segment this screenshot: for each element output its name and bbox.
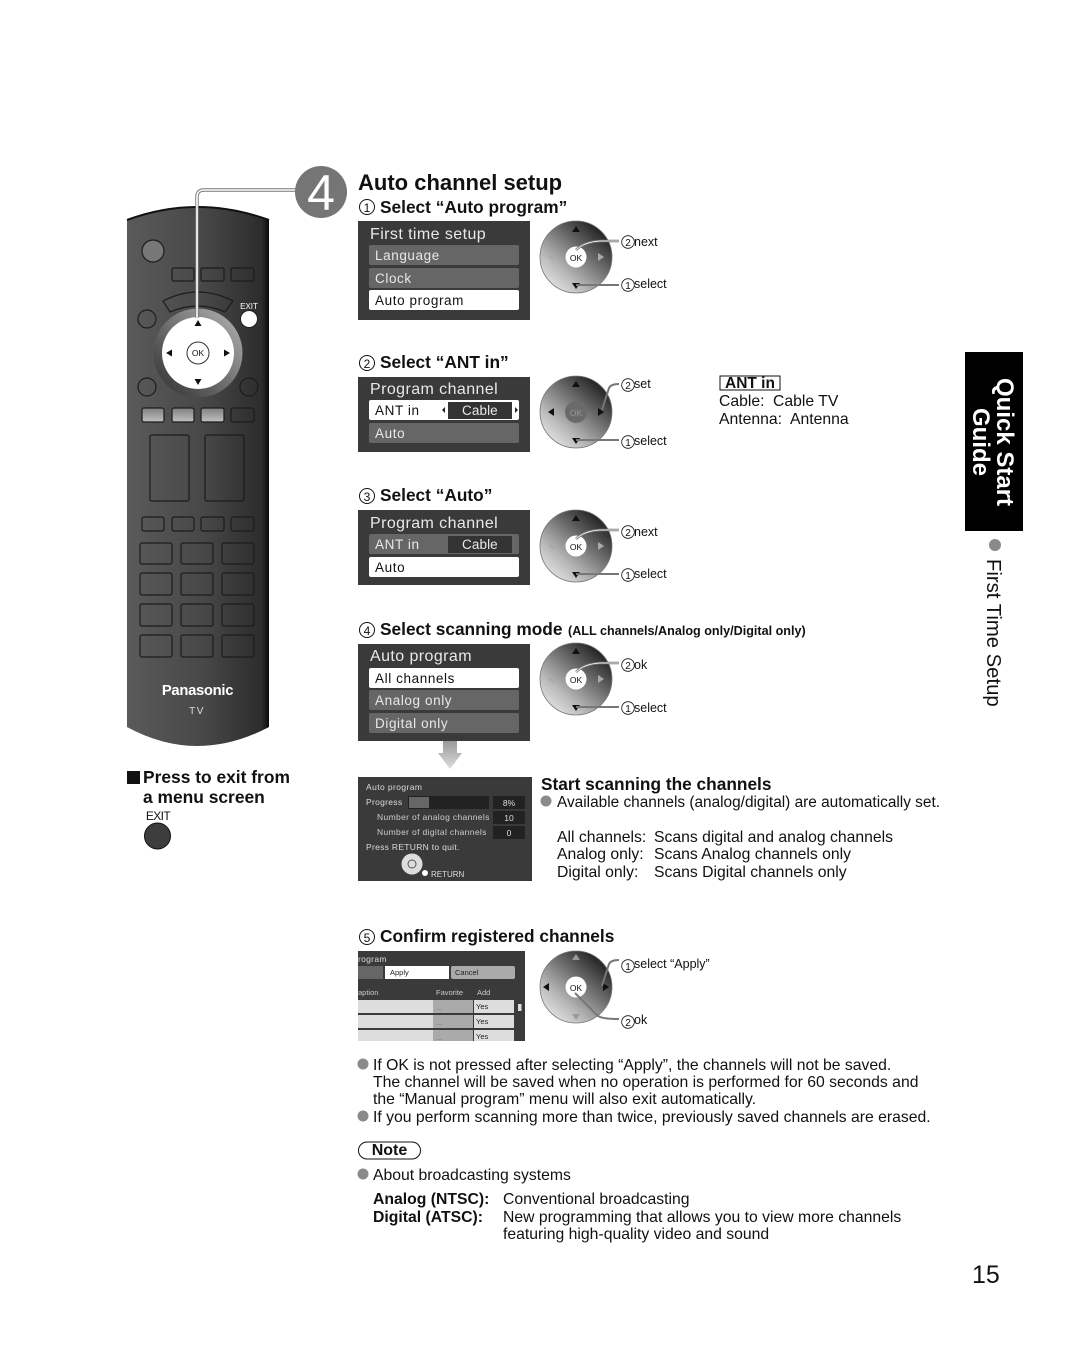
dial 3 (540, 510, 667, 582)
note badge: Note (372, 1142, 407, 1159)
screen: confirm channels: ... (436, 1033, 442, 1042)
screen: confirm channels: rogram (358, 954, 387, 964)
dial 2: 2 (625, 381, 631, 392)
heading: auto channel setup: Auto channel setup (358, 170, 562, 195)
text: start scanning the channels (540, 774, 940, 881)
dial 2: 1 (625, 438, 631, 449)
heading: step 4: Select scanning mode (380, 619, 563, 639)
screen: confirm channels: Cancel (455, 968, 479, 977)
dial 1: 2 (625, 238, 631, 249)
ANT in options: Antenna (790, 411, 849, 428)
screen: confirm channels: Yes (476, 1032, 488, 1041)
text: start scanning the channels: Analog only: (557, 846, 644, 863)
heading: step 4 (360, 619, 806, 639)
heading: step 4: 4 (364, 624, 371, 638)
screen: program channel auto: Program channel (370, 515, 498, 532)
dial 3: next (634, 525, 658, 539)
dial 1 (540, 221, 667, 293)
text: start scanning the channels: Scans digital and analog channels (654, 829, 893, 846)
screen: program channel auto: Cable (462, 537, 498, 552)
note text: broadcasting systems: Conventional broadcasting (503, 1191, 690, 1208)
screen: confirm channels: Yes (476, 1002, 488, 1011)
screen: auto program modes: Auto program (370, 648, 472, 665)
page number: 15 (972, 1261, 1000, 1289)
text: start scanning the channels: Available channels (analog/digital) are automatically set. (557, 794, 940, 811)
heading: step 2: 2 (364, 357, 371, 371)
step 4 badge (295, 165, 347, 221)
dial 2: set (634, 377, 651, 391)
screen: scanning progress: 8% (503, 798, 516, 808)
dial 1: 1 (625, 281, 631, 292)
side tab: quick start guide: Quick Start (991, 378, 1018, 506)
screen: scanning progress: Progress (366, 797, 402, 807)
dial 1: next (634, 235, 658, 249)
heading: step 1: 1 (364, 201, 371, 215)
note text: broadcasting systems: About broadcasting systems (373, 1167, 571, 1184)
exit note: Press to exit from (143, 767, 290, 787)
exit note: a menu screen (143, 787, 265, 807)
dial 4: select (634, 701, 667, 715)
dial 2: select (634, 434, 667, 448)
screen: program channel auto: Auto (375, 560, 405, 575)
screen: scanning progress (358, 777, 532, 881)
screen: auto program modes: All channels (375, 671, 455, 686)
text: start scanning the channels: Scans Analog channels only (654, 846, 851, 863)
side label: first time setup: First Time Setup (982, 559, 1004, 707)
step 4 badge: 4 (307, 165, 335, 221)
screen: scanning progress: Auto program (366, 782, 422, 792)
screen: confirm channels: Apply (390, 968, 409, 977)
dial 4 (540, 643, 667, 715)
screen: program channel ANT in: Program channel (370, 381, 498, 398)
screen: first time setup: Language (375, 248, 440, 263)
screen: program channel ANT in (358, 377, 530, 452)
dial 4: OK (570, 675, 582, 685)
dial 3: 2 (625, 528, 631, 539)
screen: confirm channels (358, 951, 525, 1042)
screen: first time setup: Auto program (375, 293, 464, 308)
screen: first time setup (358, 221, 530, 320)
screen: program channel ANT in: ANT in (375, 403, 420, 418)
bullet notes: The channel will be saved when no operation is performed for 60 seconds and (373, 1074, 918, 1091)
dial 4: 1 (625, 704, 631, 715)
screen: confirm channels: Yes (476, 1017, 488, 1026)
ANT in options: Antenna: (719, 411, 782, 428)
dial 1: OK (570, 253, 582, 263)
dial 3: OK (570, 542, 582, 552)
side tab: quick start guide: Guide (967, 408, 994, 476)
ANT in options: Cable: (719, 393, 765, 410)
screen: confirm channels: ... (436, 1003, 442, 1012)
note text: broadcasting systems: Digital (ATSC): (373, 1209, 483, 1226)
note text: broadcasting systems (358, 1167, 901, 1243)
screen: program channel auto: ANT in (375, 537, 420, 552)
dial 2: OK (570, 408, 582, 418)
dial 4: ok (634, 658, 648, 672)
text: start scanning the channels: All channels: (557, 829, 646, 846)
heading: step 4: (ALL channels/Analog only/Digital only) (568, 624, 806, 638)
ANT in options (719, 375, 849, 428)
dial 5: 1 (625, 962, 631, 973)
heading: step 5: 5 (364, 931, 371, 945)
heading: step 3: Select “Auto” (380, 485, 492, 505)
dial 1: select (634, 277, 667, 291)
screen: scanning progress: 10 (504, 813, 514, 823)
screen: auto program modes (358, 644, 530, 741)
note text: broadcasting systems: Analog (NTSC): (373, 1191, 489, 1208)
dial 5: 2 (625, 1018, 631, 1029)
screen: program channel ANT in: Cable (462, 403, 498, 418)
screen: first time setup: Clock (375, 271, 412, 286)
remote control: OK (192, 348, 204, 358)
dial 2 (540, 376, 667, 449)
dial 3: 1 (625, 571, 631, 582)
side tab: quick start guide (965, 352, 1023, 531)
screen: program channel ANT in: Auto (375, 426, 405, 441)
heading: step 5: Confirm registered channels (380, 926, 614, 946)
bullet notes: If OK is not pressed after selecting “Apply”, the channels will not be saved. (373, 1057, 891, 1074)
screen: confirm channels: aption (358, 988, 378, 997)
text: start scanning the channels: Digital only: (557, 864, 638, 881)
note text: broadcasting systems: featuring high-quality video and sound (503, 1226, 769, 1243)
dial 5: OK (570, 983, 582, 993)
screen: scanning progress: 0 (507, 828, 512, 838)
arrow: down to scanning (438, 741, 462, 769)
screen: confirm channels: Add (477, 988, 490, 997)
dial 4: 2 (625, 661, 631, 672)
dial 5: ok (634, 1013, 648, 1027)
remote control: Panasonic (162, 683, 233, 699)
bullet notes: the “Manual program” menu will also exit automatically. (373, 1091, 756, 1108)
remote control (127, 207, 269, 746)
heading: step 2: Select “ANT in” (380, 352, 509, 372)
heading: step 3: 3 (364, 490, 371, 504)
remote control: TV (189, 706, 205, 717)
dial 5 (540, 951, 710, 1029)
screen: scanning progress: RETURN (431, 870, 465, 879)
dial 3: select (634, 567, 667, 581)
exit note: EXIT (146, 809, 171, 823)
ANT in options: ANT in (725, 375, 775, 392)
note text: broadcasting systems: New programming that allows you to view more channels (503, 1209, 901, 1226)
remote control: EXIT (240, 302, 258, 311)
text: start scanning the channels: Scans Digital channels only (654, 864, 847, 881)
screen: confirm channels: ... (436, 1018, 442, 1027)
screen: first time setup: First time setup (370, 226, 486, 243)
screen: scanning progress: Number of analog channels (377, 812, 490, 822)
screen: auto program modes: Analog only (375, 693, 452, 708)
bullet notes (358, 1057, 931, 1126)
screen: auto program modes: Digital only (375, 716, 448, 731)
screen: program channel auto (358, 510, 530, 585)
screen: scanning progress: Press RETURN to quit. (366, 842, 460, 852)
exit note (127, 767, 290, 849)
bullet notes: If you perform scanning more than twice, previously saved channels are erased. (373, 1109, 931, 1126)
screen: confirm channels: Favorite (436, 988, 463, 997)
connector line from step 4 badge to remote (197, 190, 298, 318)
dial 5: select “Apply” (634, 957, 710, 971)
note badge (358, 1142, 420, 1159)
heading: step 1: Select “Auto program” (380, 197, 567, 217)
screen: scanning progress: Number of digital channels (377, 827, 487, 837)
text: start scanning the channels: Start scanning the channels (541, 774, 771, 794)
ANT in options: Cable TV (773, 393, 839, 410)
